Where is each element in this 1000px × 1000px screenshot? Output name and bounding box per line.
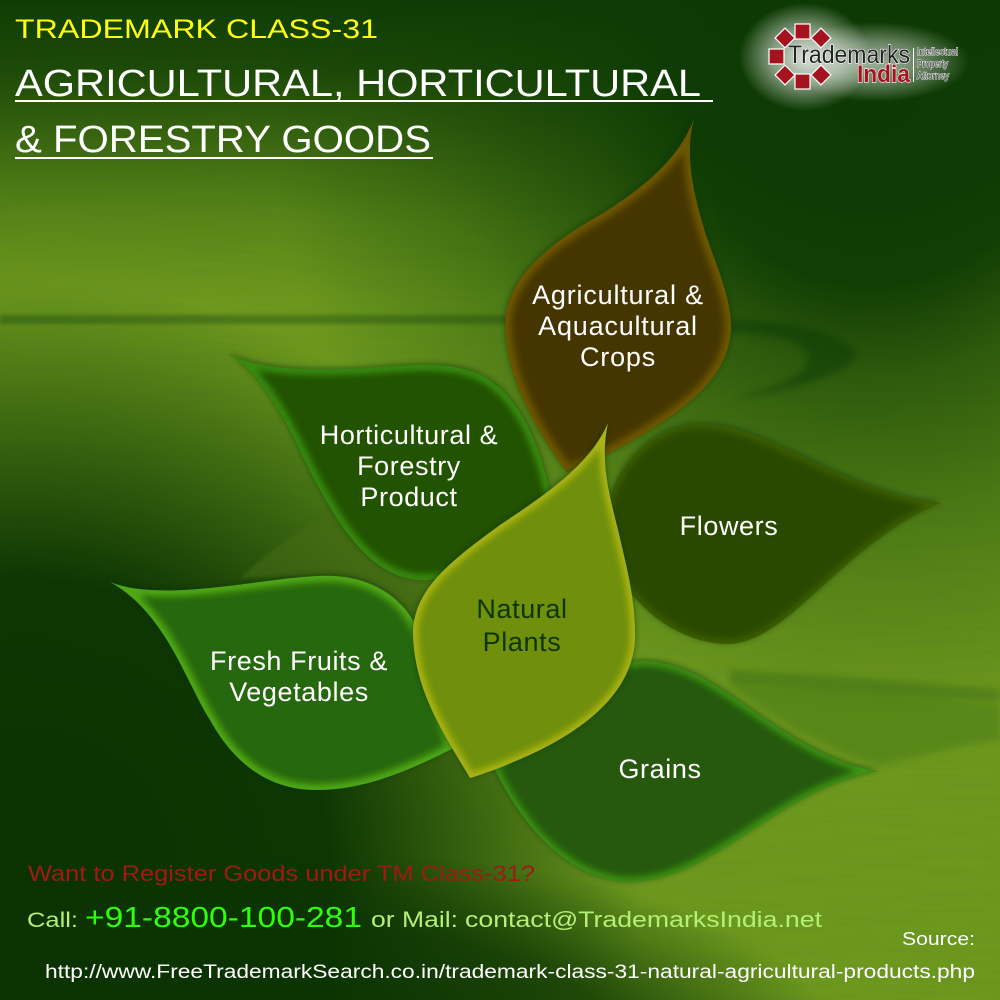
call to action: Want to Register Goods under TM Class-31? [28, 861, 535, 886]
label: Vegetables [229, 677, 369, 707]
label: Natural [476, 594, 568, 624]
label: Crops [580, 342, 656, 372]
label: Agricultural & [532, 280, 704, 310]
label: Horticultural & [320, 420, 498, 450]
contact line [27, 902, 822, 934]
email address: contact@TrademarksIndia.net [465, 907, 822, 932]
leaf: Grains [495, 661, 878, 882]
logo tagline: Attorney [917, 71, 949, 82]
leaf: Natural Plants [413, 423, 635, 778]
title line 2: & FORESTRY GOODS [15, 119, 431, 161]
icon: red square ring [769, 24, 831, 89]
label: Aquacultural [538, 311, 698, 341]
label: Product [360, 482, 458, 512]
label: Forestry [357, 451, 461, 481]
source url: http://www.FreeTrademarkSearch.co.in/trademark-class-31-natural-agricultural-products.php [45, 962, 975, 983]
title kicker: TRADEMARK CLASS-31 [15, 14, 378, 44]
title [15, 14, 713, 161]
leaf: Fresh Fruits & Vegetables [110, 576, 452, 790]
logo tagline: Intellectual [917, 47, 958, 58]
contact line: or Mail: [371, 907, 458, 932]
logo tagline: Property [917, 59, 948, 70]
logo tagline [917, 47, 958, 82]
leaf: Agricultural & Aquacultural Crops [505, 116, 731, 472]
logo wordmark: Trademarks [788, 41, 910, 69]
source label: Source: [902, 929, 975, 949]
leaf: Horticultural & Forestry Product [228, 353, 552, 580]
label: Grains [618, 754, 702, 784]
leaf: Flowers [606, 424, 940, 644]
logo: Trademarks India: India [857, 61, 911, 88]
label: Flowers [680, 511, 778, 541]
label: Plants [483, 627, 561, 657]
phone number: +91-8800-100-281 [85, 902, 362, 934]
label: Fresh Fruits & [210, 646, 388, 676]
logo: Trademarks India [739, 3, 970, 111]
contact line: Call: [27, 909, 78, 932]
title line 1: AGRICULTURAL, HORTICULTURAL [15, 63, 701, 105]
